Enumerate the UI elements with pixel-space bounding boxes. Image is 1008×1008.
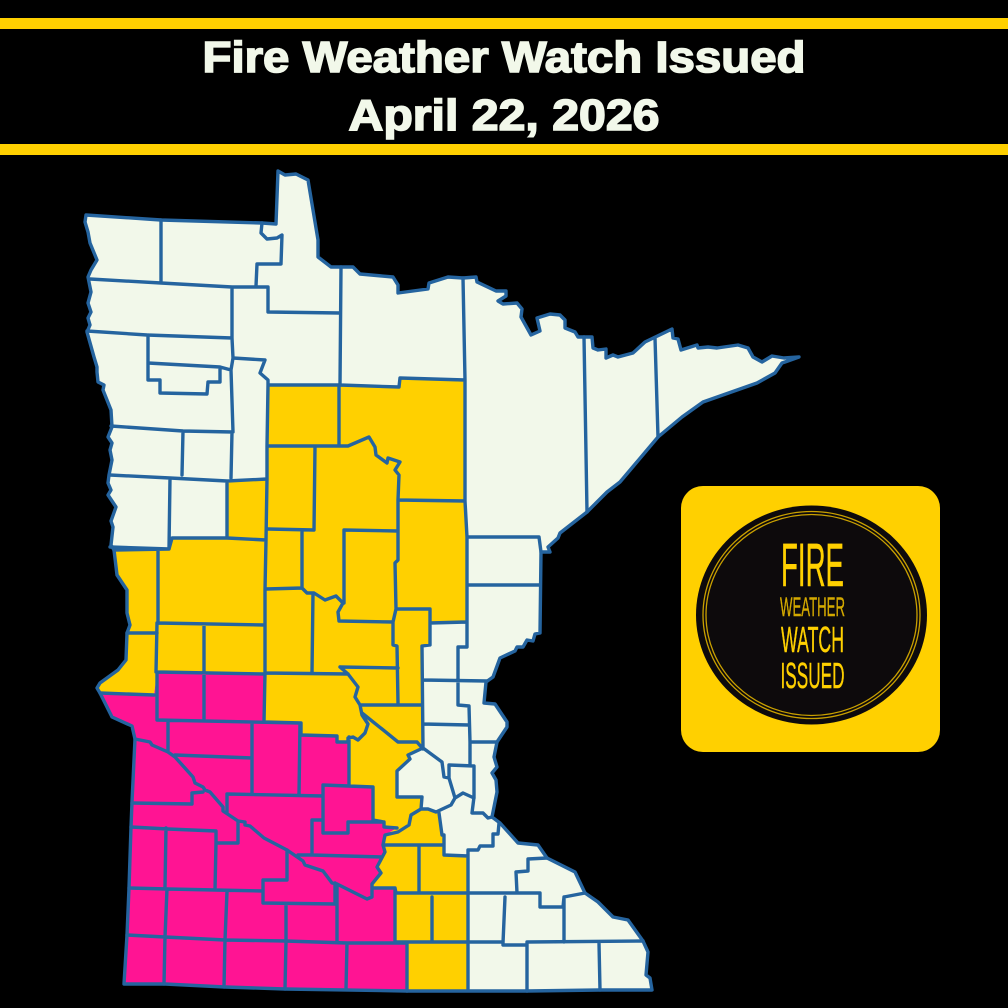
badge text: WATCH	[781, 619, 844, 660]
map: Minnesota counties	[85, 171, 799, 991]
badge text	[780, 531, 845, 696]
badge: fire weather watch issued: FIRE	[781, 531, 844, 599]
fire weather watch area: yellow counties	[97, 378, 468, 991]
badge: fire weather watch issued: WEATHER	[780, 592, 845, 622]
state outline	[85, 171, 799, 991]
red flag area: pink counties	[100, 672, 407, 991]
badge: fire weather watch issued: ISSUED	[780, 655, 844, 696]
county boundaries	[87, 220, 643, 991]
header banner	[0, 18, 1008, 155]
lake superior county lines	[584, 337, 658, 512]
title: Fire Weather Watch Issued	[202, 33, 805, 82]
badge circle	[696, 506, 927, 724]
date: April 22, 2026	[348, 91, 660, 140]
state border	[85, 171, 799, 991]
badge: fire weather watch issued	[681, 486, 940, 752]
